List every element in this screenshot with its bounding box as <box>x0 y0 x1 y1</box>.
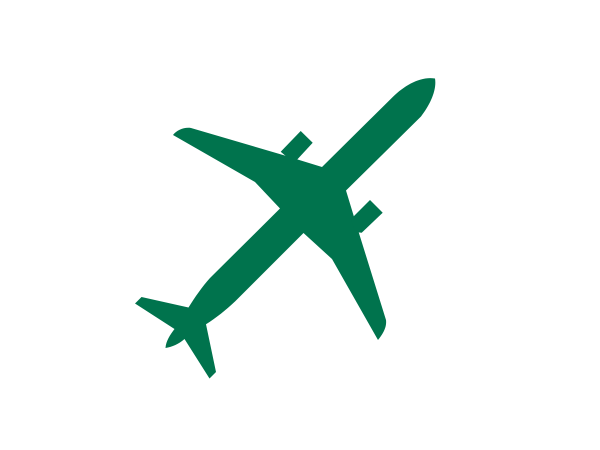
icon: airplane <box>135 78 435 378</box>
airplane body and wings <box>135 78 435 378</box>
left engine <box>281 131 313 163</box>
right engine <box>351 200 383 233</box>
